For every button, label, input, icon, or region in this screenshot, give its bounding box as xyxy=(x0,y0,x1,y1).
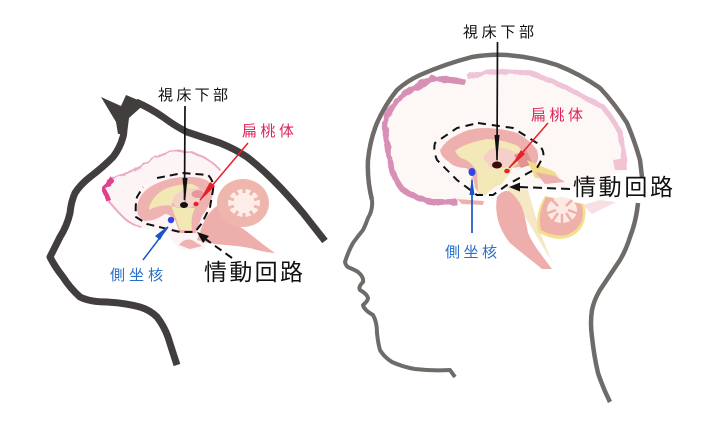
pink nucleus left xyxy=(192,190,204,198)
label: hypothalamus left: 視床下部 xyxy=(158,87,228,104)
cream band beside brainstem right xyxy=(506,186,552,262)
brainstem right xyxy=(496,191,552,269)
hypothalamus marker right xyxy=(492,162,502,168)
yellow tail right xyxy=(527,160,560,180)
inner yellow band right xyxy=(455,139,528,196)
label: amygdala left: 扁桃体 xyxy=(242,123,294,140)
limbic structures left xyxy=(137,177,213,233)
arrow: nucleus accumbens right xyxy=(470,177,474,233)
arrow: nucleus accumbens left xyxy=(143,226,168,260)
head outline left xyxy=(50,95,325,365)
panel: left head, tilted back xyxy=(50,87,325,365)
lower pink knob right xyxy=(457,199,484,205)
inner yellow band left xyxy=(149,184,200,230)
panel: right head, upright xyxy=(345,24,673,402)
label: emotional circuit left: 情動回路 xyxy=(204,259,303,285)
label: nucleus accumbens right: 側坐核 xyxy=(445,244,497,261)
dashed arrow: circuit left xyxy=(197,232,232,258)
neck back outline right xyxy=(591,203,638,402)
brainstem left xyxy=(197,205,275,253)
label: nucleus accumbens left: 側坐核 xyxy=(110,267,163,284)
pink nucleus right xyxy=(514,150,533,168)
dashed circuit loop left xyxy=(136,173,213,232)
inner pink left xyxy=(172,188,206,208)
limbic arc right xyxy=(440,128,538,196)
temporal patch right xyxy=(613,158,627,170)
cortex edge dark right xyxy=(385,78,465,202)
dashed arrow: circuit right xyxy=(509,182,570,192)
cerebellum left xyxy=(217,179,269,227)
lower pink knob left xyxy=(179,240,202,249)
pink tail right xyxy=(535,172,565,184)
nucleus accumbens marker right xyxy=(468,168,476,176)
arrow: amygdala left xyxy=(199,143,248,202)
label: emotional circuit right: 情動回路 xyxy=(573,174,673,200)
amygdala marker right xyxy=(504,169,510,173)
nucleus accumbens marker left xyxy=(168,217,174,223)
brain outline right xyxy=(385,72,625,202)
hypothalamus marker left xyxy=(180,202,188,208)
cortex edge light right xyxy=(467,72,625,167)
label: hypothalamus right: 視床下部 xyxy=(463,24,534,41)
head outline right xyxy=(368,55,642,200)
cerebellum right xyxy=(537,196,586,239)
label: amygdala right: 扁桃体 xyxy=(531,107,583,124)
arrow: amygdala right xyxy=(509,123,548,168)
amygdala marker left xyxy=(193,202,199,206)
brain outline left xyxy=(103,151,220,250)
cortex edge left xyxy=(108,151,220,228)
dashed circuit loop right xyxy=(434,123,543,195)
arrow: hypothalamus right xyxy=(494,42,500,163)
arrow: hypothalamus left xyxy=(182,106,188,203)
inner pink right xyxy=(483,148,517,168)
frontal pole left xyxy=(103,179,113,201)
occipital wisp right xyxy=(583,200,616,214)
face outline right xyxy=(345,200,455,377)
